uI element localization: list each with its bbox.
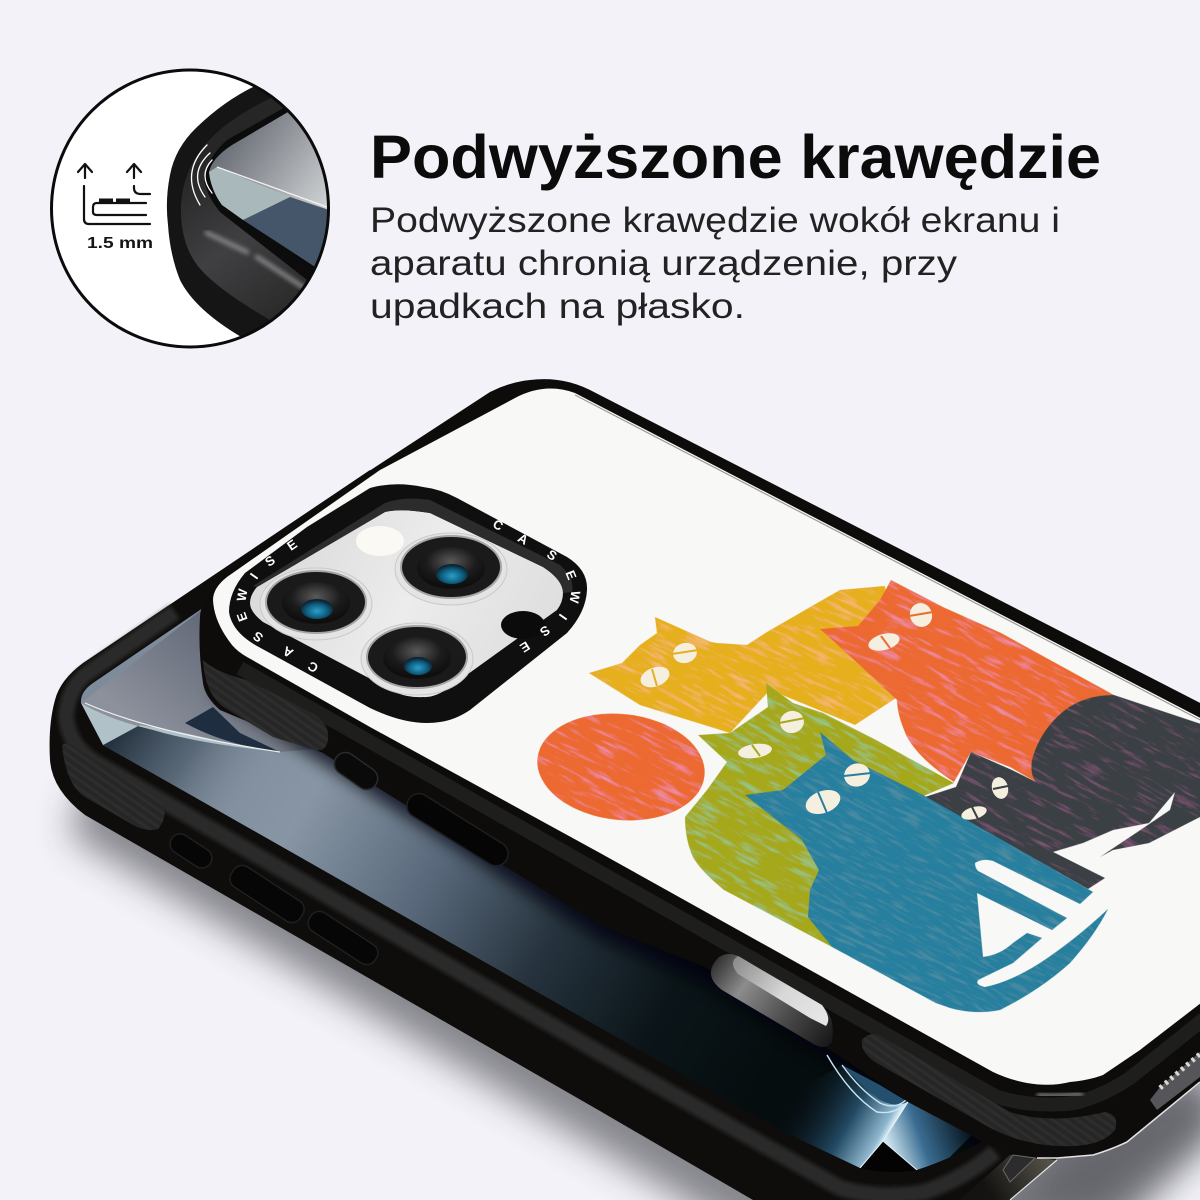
bottom edge highlight: [1037, 1082, 1200, 1158]
mute switch: [330, 748, 382, 794]
ring lettering CASEWISE: S: [250, 628, 266, 646]
ring lettering CASEWISE: E: [562, 568, 580, 582]
rim gloss: [1037, 1093, 1083, 1096]
upper phone bumper: [199, 379, 1200, 1158]
ring lettering CASEWISE: E: [284, 536, 300, 554]
camera lenses: [260, 533, 507, 695]
ring lettering CASEWISE: A: [280, 643, 296, 661]
blue cat: [632, 585, 1200, 1159]
lower phone screen: [80, 609, 981, 1172]
ring lettering CASEWISE: I: [247, 570, 261, 582]
port highlight line: [1010, 1160, 1057, 1200]
description text: upadkach na płasko.: [370, 287, 745, 326]
lower phone rim highlight: [66, 612, 995, 1195]
upper phone corner patches: [862, 1034, 1116, 1146]
ring lettering CASEWISE: A: [515, 530, 531, 548]
ring lettering CASEWISE: W: [566, 590, 583, 605]
ring lettering CASEWISE: W: [234, 587, 251, 602]
cast shadow under phones: [70, 785, 1200, 1200]
ring lettering CASEWISE: S: [262, 552, 278, 570]
side button: [402, 789, 513, 870]
lower phone corner patch: [62, 743, 165, 830]
inset circle: raised edge detail: [52, 60, 340, 347]
inset phone corner photo: [166, 87, 327, 336]
volume and action buttons: [166, 830, 382, 968]
orange ball: [498, 652, 744, 882]
cat eye slits: [652, 612, 1008, 819]
speaker grille: [1150, 1052, 1200, 1110]
lower port opening: [1003, 1155, 1035, 1182]
shadow under upper phone: [206, 694, 979, 1140]
back plate: [213, 389, 1200, 1085]
description text: [370, 201, 1060, 326]
screen rays: [791, 1066, 908, 1168]
metal port edge: [960, 1155, 1057, 1200]
camera island: [229, 484, 587, 723]
ring lettering CASEWISE: E: [517, 638, 533, 656]
heading: Podwyższone krawędzie: [370, 123, 1101, 191]
cat eyes: [638, 600, 1011, 822]
charging port: [711, 954, 833, 1047]
description text: Podwyższone krawędzie wokół ekranu i: [370, 201, 1060, 240]
description text: aparatu chronią urządzenie, przy: [370, 244, 958, 283]
flash: [356, 526, 404, 556]
artwork: colourful cats: [498, 461, 1200, 1159]
ring lettering CASEWISE: S: [544, 546, 560, 564]
orange cat: [738, 461, 1196, 901]
ring lettering CASEWISE: S: [537, 622, 553, 640]
ring inner lip: [253, 499, 572, 593]
black cat: [847, 580, 1200, 1004]
green cat: [578, 574, 1061, 1056]
camera window: [250, 510, 563, 697]
ring lettering CASEWISE: C: [305, 658, 321, 676]
ring lettering CASEWISE: [233, 516, 583, 676]
ring lettering CASEWISE: I: [556, 611, 570, 623]
cast shadow at corner: [1000, 1075, 1200, 1200]
lower phone bumper: [50, 470, 1057, 1200]
lidar sensor: [501, 611, 545, 639]
camera ring: [229, 484, 587, 723]
upper phone body: [199, 379, 1200, 1158]
ring lettering CASEWISE: E: [233, 610, 251, 624]
icon: raised edge diagram with arrows: [78, 164, 150, 224]
measurement label: 1.5 mm: [87, 235, 153, 252]
front rim: [240, 668, 1200, 1104]
lower phone with bumper: [50, 470, 1060, 1200]
ring lettering CASEWISE: C: [490, 516, 506, 534]
yellow cat: [530, 461, 958, 858]
